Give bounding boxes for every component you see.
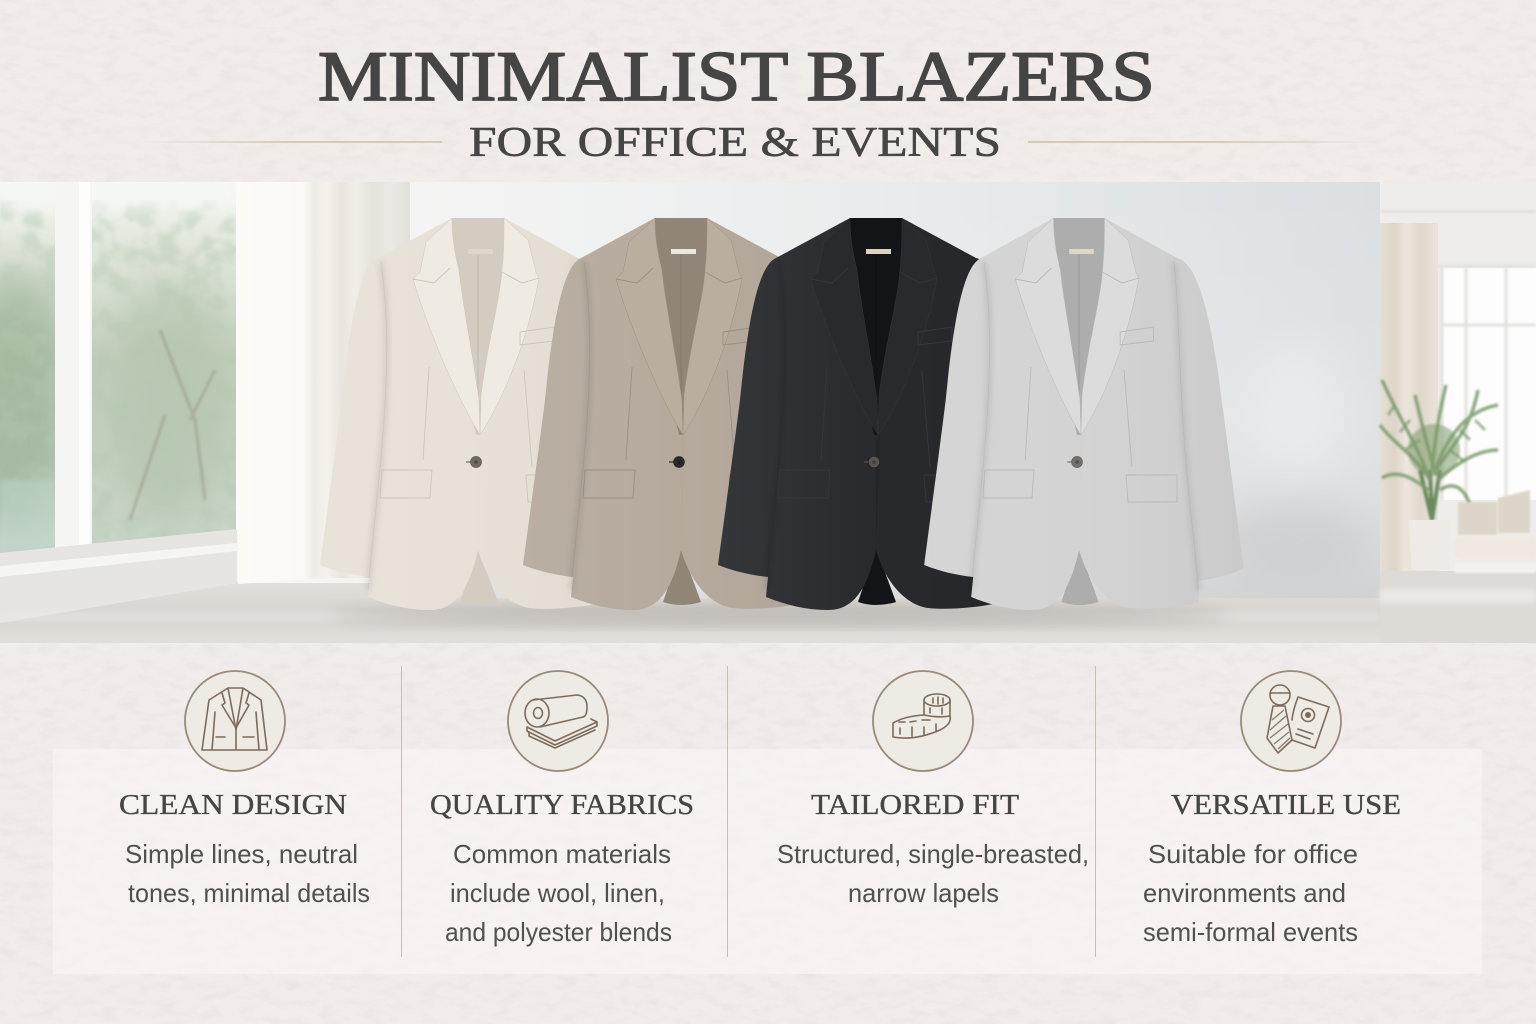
blazer: light grey bbox=[924, 218, 1244, 610]
description: Simple lines, neutral bbox=[125, 839, 358, 869]
description bbox=[777, 839, 1089, 908]
heading: VERSATILE USE bbox=[1171, 789, 1401, 821]
icon: fabric roll bbox=[508, 671, 608, 771]
icon: blazer bbox=[185, 671, 285, 771]
description: Common materials bbox=[453, 839, 671, 869]
curtains bbox=[238, 182, 410, 584]
description bbox=[1143, 839, 1358, 947]
heading: TAILORED FIT bbox=[811, 789, 1019, 821]
icon: tie and document bbox=[1241, 671, 1341, 771]
shadow under blazers bbox=[330, 606, 1230, 624]
icon: measuring tape bbox=[873, 671, 973, 771]
description bbox=[445, 839, 672, 947]
window sill bbox=[0, 529, 237, 623]
feature: versatile use bbox=[1143, 671, 1401, 947]
left window with trees bbox=[0, 182, 254, 562]
card panel behind features bbox=[53, 749, 1482, 974]
blazer: black bbox=[718, 218, 992, 610]
feature: tailored fit bbox=[777, 671, 1089, 908]
heading: QUALITY FABRICS bbox=[430, 789, 694, 821]
description: Suitable for office bbox=[1148, 839, 1358, 869]
sofa bbox=[1452, 490, 1536, 573]
subtitle with rules: FOR OFFICE & EVENTS bbox=[469, 120, 1001, 166]
description: environments and bbox=[1143, 878, 1346, 908]
blazer: taupe bbox=[523, 218, 792, 610]
description bbox=[125, 839, 370, 908]
right room view bbox=[1380, 182, 1536, 643]
description: narrow lapels bbox=[848, 878, 999, 908]
floor bbox=[0, 583, 1380, 643]
feature: quality fabrics bbox=[430, 671, 694, 947]
title: MINIMALIST BLAZERS bbox=[318, 38, 1155, 116]
plant bbox=[1380, 380, 1498, 520]
back wall bbox=[237, 182, 1380, 598]
blazer: ivory bbox=[320, 218, 592, 610]
heading: CLEAN DESIGN bbox=[119, 789, 347, 821]
panel: room photo with blazers bbox=[0, 182, 1536, 643]
description: tones, minimal details bbox=[128, 878, 370, 908]
pot bbox=[1409, 520, 1438, 571]
feature: clean design bbox=[119, 671, 370, 908]
description: semi-formal events bbox=[1143, 917, 1358, 947]
description: Structured, single-breasted, bbox=[777, 839, 1089, 869]
description: include wool, linen, bbox=[450, 878, 665, 908]
column dividers bbox=[401, 666, 1096, 957]
description: and polyester blends bbox=[445, 917, 672, 947]
